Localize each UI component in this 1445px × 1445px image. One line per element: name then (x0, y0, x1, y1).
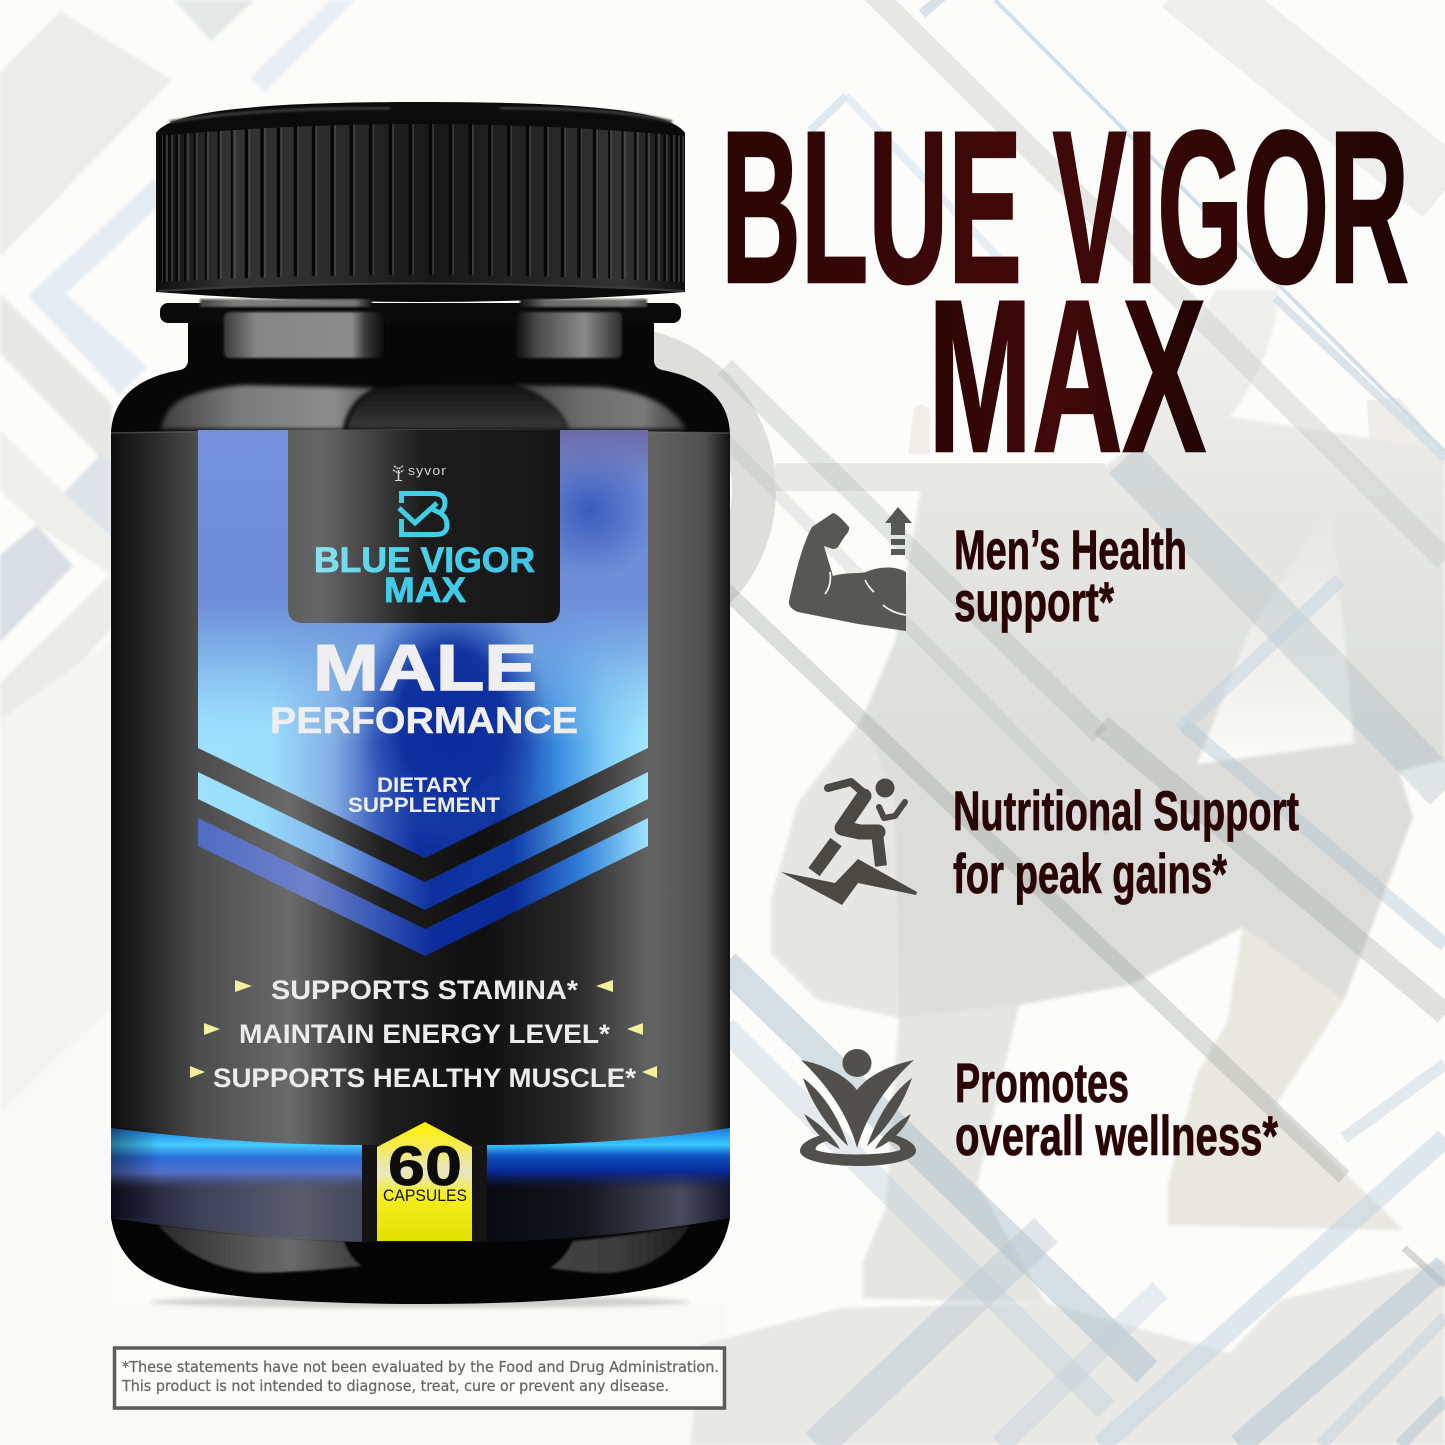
icon: runner (781, 778, 917, 905)
feature: men's health (789, 507, 1187, 633)
title: MAX (928, 255, 1206, 497)
cap (156, 100, 685, 307)
text: for peak gains* (953, 842, 1227, 905)
floor (690, 1260, 1445, 1445)
label heading (270, 631, 578, 817)
cap collar ring (200, 299, 372, 307)
icon: tree (393, 466, 404, 480)
label heading: DIETARY (377, 774, 472, 797)
label heading: MALE (313, 631, 537, 704)
weight plate and bar (470, 348, 1432, 632)
text: overall wellness* (955, 1104, 1278, 1167)
text: Men’s Health (954, 518, 1187, 581)
product bottle (111, 100, 730, 1308)
text: support* (954, 570, 1114, 633)
neck and shoulder (111, 303, 730, 434)
capsule count badge (377, 1122, 472, 1241)
man silhouette (690, 289, 1445, 1445)
capsule count badge: 60 (388, 1134, 462, 1197)
diagonal bands right (725, 0, 1445, 1445)
logo box (288, 430, 560, 623)
text (953, 779, 1299, 905)
label heading: SUPPLEMENT (348, 794, 500, 817)
feature: nutritional support (781, 778, 1299, 905)
icon: figure with leaves (800, 1049, 916, 1166)
left geometric facets (0, 0, 725, 1445)
benefit bullet list: SUPPORTS HEALTHY MUSCLE* (213, 1063, 636, 1093)
icon: flexed arm with arrow (789, 507, 912, 631)
disclaimer box: This product is not intended to diagnose, treat, cure or prevent any disease. (121, 1377, 669, 1395)
product name: BLUE VIGOR (314, 541, 535, 580)
blue label panel (198, 430, 648, 956)
capsule count badge: CAPSULES (383, 1186, 467, 1205)
logo box: MAX (384, 571, 467, 610)
text (954, 518, 1187, 633)
logo B check (399, 494, 447, 534)
benefit bullet list (190, 975, 657, 1093)
text (955, 1051, 1278, 1167)
benefit bullet list: MAINTAIN ENERGY LEVEL* (239, 1019, 611, 1049)
title (721, 86, 1409, 497)
benefit bullet list: SUPPORTS STAMINA* (271, 975, 579, 1005)
bottle body (111, 432, 730, 1304)
disclaimer box: *These statements have not been evaluated by the Food and Drug Administration. (122, 1358, 719, 1376)
brand syvor: syvor (408, 463, 447, 478)
chevron bands (198, 772, 648, 910)
text: Promotes (955, 1051, 1129, 1114)
label heading: PERFORMANCE (270, 700, 578, 741)
label bottom stripe (111, 1128, 730, 1242)
label background (111, 430, 730, 1200)
feature: wellness (800, 1049, 1278, 1167)
disclaimer box (114, 1348, 724, 1410)
base highlights (158, 1225, 690, 1273)
bottle shadow (150, 1296, 690, 1308)
